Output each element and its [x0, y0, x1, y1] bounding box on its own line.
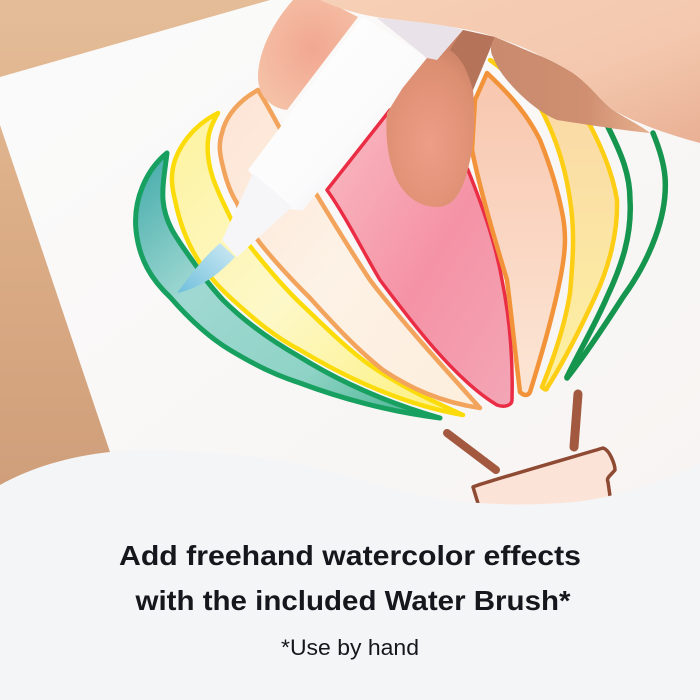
index finger	[386, 30, 495, 207]
footnote: *Use by hand	[281, 635, 419, 660]
basket rope left	[447, 433, 496, 470]
finger knuckle shadow	[450, 30, 495, 90]
balloon segment: teal	[136, 153, 440, 418]
balloon stroke: right green outer	[567, 133, 665, 378]
watercolor paper	[0, 0, 700, 520]
balloon segment: yellow	[172, 113, 463, 415]
balloon segment: peach	[220, 90, 480, 408]
basket rope right	[574, 394, 578, 447]
water brush pen	[177, 17, 463, 293]
pen grip cap	[377, 18, 463, 60]
balloon stroke: right green inner	[567, 127, 630, 377]
hand	[258, 0, 700, 207]
balloon segment: right yellow	[490, 60, 617, 389]
hot air balloon illustration	[136, 60, 665, 510]
basket	[473, 448, 615, 510]
headline	[119, 540, 581, 616]
palm	[320, 0, 700, 143]
headline line 1: Add freehand watercolor effects	[119, 540, 581, 571]
curled finger	[491, 37, 650, 133]
pen barrel	[248, 17, 427, 210]
balloon segment: pink	[327, 100, 512, 406]
pen neck	[222, 173, 292, 257]
brush tip	[177, 243, 235, 293]
headline line 2: with the included Water Brush*	[134, 585, 571, 616]
thumb	[258, 0, 358, 110]
wave panel	[0, 450, 700, 700]
balloon segment: orange	[472, 73, 565, 395]
